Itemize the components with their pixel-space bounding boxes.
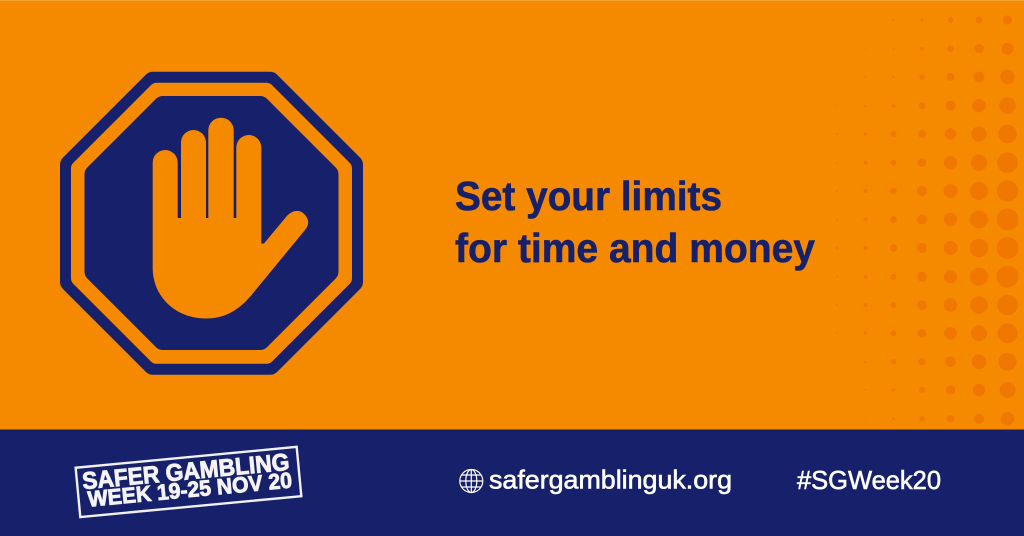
headline: for time and money [455, 225, 815, 271]
website address: safergamblinguk.org [489, 464, 732, 494]
headline [455, 173, 815, 271]
stop sign outer ring [70, 82, 353, 365]
stamp border [76, 447, 301, 517]
stamp text line 1: SAFER GAMBLING [81, 449, 291, 495]
headline: Set your limits [455, 173, 722, 219]
icon: stop sign with raised hand [70, 82, 353, 365]
footer band [0, 430, 1024, 536]
icon: globe [460, 470, 483, 492]
icon: raised hand [153, 118, 308, 318]
halftone dot pattern [836, 15, 1018, 425]
stamp text line 2: WEEK 19-25 NOV 20 [87, 467, 293, 512]
campaign stamp logo [76, 447, 301, 517]
stop sign inner panel [94, 106, 328, 340]
hashtag: #SGWeek20 [797, 465, 941, 495]
